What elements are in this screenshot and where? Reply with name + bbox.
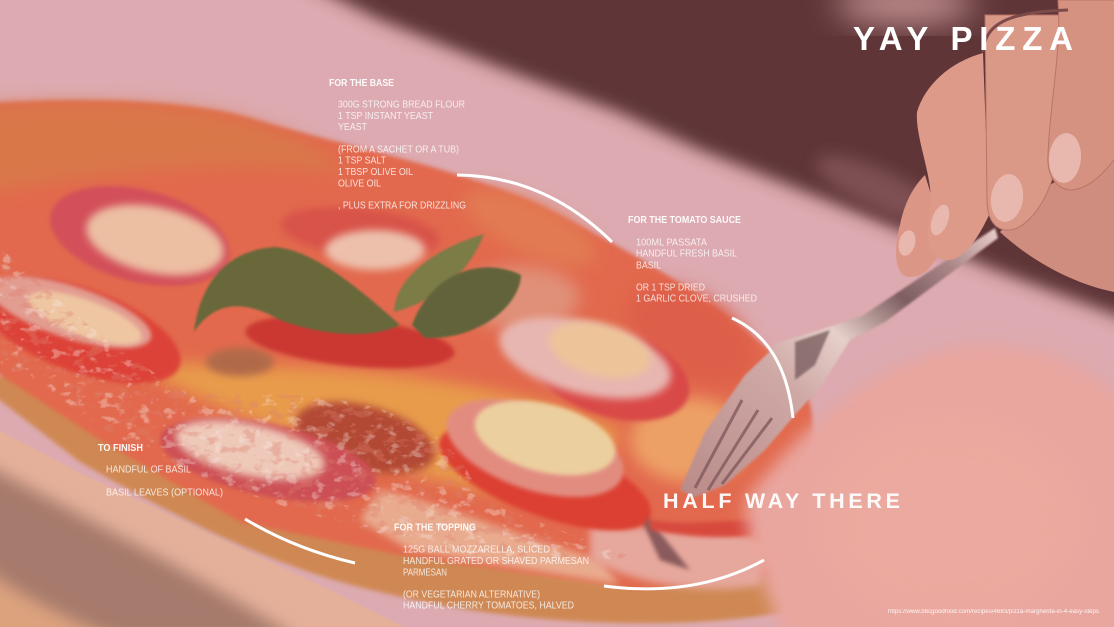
photo: blurred hand in foreground bbox=[745, 345, 1114, 627]
title: YAY PIZZA bbox=[853, 20, 1073, 57]
cheese and char texture bbox=[0, 252, 626, 559]
subtitle: half way there: HALF WAY THERE bbox=[663, 489, 900, 513]
ingredient list: for the tomato sauce: OR 1 TSP DRIED bbox=[636, 282, 705, 294]
progress arc: tomato sauce bbox=[732, 318, 793, 418]
ingredient list: for the tomato sauce: HANDFUL FRESH BASIL bbox=[636, 248, 737, 260]
ingredient list: for the base: 1 TSP SALT bbox=[338, 156, 386, 166]
source url: https://www.bbcgoodfood.com/recipes/4683/pizza-margherita-in-4-easy-steps bbox=[888, 609, 1099, 615]
basil leaves bbox=[194, 234, 521, 338]
ingredient list: for the tomato sauce bbox=[628, 215, 757, 304]
progress arc: to finish bbox=[245, 519, 355, 563]
ingredient list: for the base bbox=[329, 78, 466, 212]
progress arc: base bbox=[457, 175, 612, 242]
ingredient list: for the base: 1 TBSP OLIVE OIL bbox=[338, 167, 413, 178]
ingredient list: for the topping: 125G BALL MOZZARELLA, SLICED bbox=[403, 544, 550, 556]
ingredient list: for the base: 1 TSP INSTANT YEAST bbox=[338, 111, 433, 122]
ingredient list: for the topping: HANDFUL GRATED OR SHAVED PARMESAN bbox=[403, 556, 589, 567]
ingredient list: for the base: (FROM A SACHET OR A TUB) bbox=[338, 144, 459, 156]
progress arc: topping bbox=[604, 560, 764, 589]
ingredient list: for the tomato sauce: 1 GARLIC CLOVE, CRUSHED bbox=[636, 294, 757, 304]
ingredient list: for the base: YEAST bbox=[338, 122, 367, 133]
ingredient list: for the tomato sauce: 100ML PASSATA bbox=[636, 238, 707, 248]
ingredient list: for the tomato sauce: BASIL bbox=[636, 260, 661, 272]
fingernails bbox=[896, 132, 1083, 258]
ingredient list: for the base: FOR THE BASE bbox=[329, 78, 394, 89]
ingredient list: to finish: HANDFUL OF BASIL bbox=[106, 464, 191, 476]
ingredient list: to finish bbox=[98, 443, 223, 498]
ingredient list: to finish: TO FINISH bbox=[98, 443, 143, 454]
ingredient list: for the base: OLIVE OIL bbox=[338, 178, 381, 190]
ingredient list: for the topping: PARMESAN bbox=[403, 568, 447, 578]
tomato slices with mozzarella bbox=[0, 169, 702, 552]
ingredient list: to finish: BASIL LEAVES (OPTIONAL) bbox=[106, 488, 223, 498]
ingredient list: for the topping: HANDFUL CHERRY TOMATOES, HALVED bbox=[403, 600, 574, 612]
ingredient list: for the tomato sauce: FOR THE TOMATO SAUCE bbox=[628, 215, 741, 226]
ingredient list: for the topping: (OR VEGETARIAN ALTERNATIVE) bbox=[403, 590, 540, 600]
ingredient list: for the topping bbox=[394, 522, 589, 612]
photo: pizza bbox=[0, 101, 813, 623]
ingredient list: for the base: , PLUS EXTRA FOR DRIZZLING bbox=[338, 200, 466, 212]
ingredient list: for the topping: FOR THE TOPPING bbox=[394, 522, 476, 534]
photo: hand holding the fork bbox=[896, 0, 1114, 295]
photo: fork bbox=[680, 228, 998, 497]
ingredient list: for the base: 300G STRONG BREAD FLOUR bbox=[338, 100, 465, 110]
